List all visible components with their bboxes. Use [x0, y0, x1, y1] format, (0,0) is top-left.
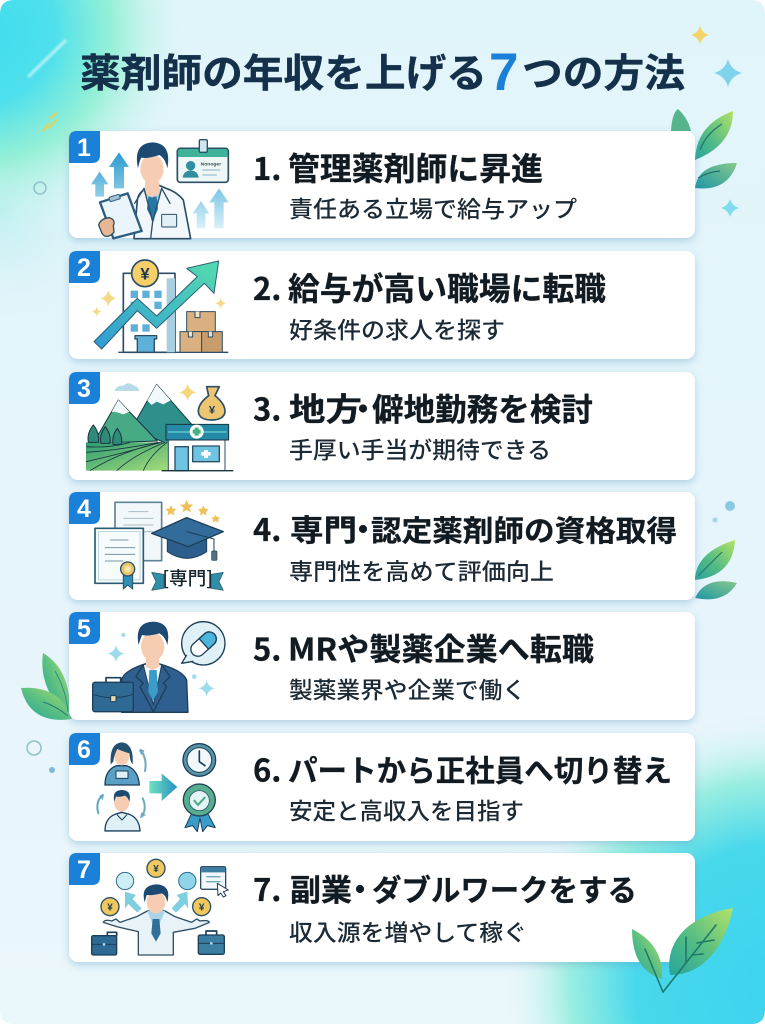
badge 5 — [69, 612, 100, 644]
panel: item 1 — [69, 131, 695, 239]
icon: side jobs and income sources — [92, 859, 228, 955]
heading 7: ・ — [344, 865, 376, 910]
icon: business person with briefcase and capsule — [93, 622, 225, 712]
heading 3: ・ — [348, 384, 378, 430]
badge 5: 5 — [77, 615, 91, 643]
badge 2: 2 — [77, 254, 91, 282]
decoration: left leaves — [21, 653, 72, 720]
badge 4 — [69, 492, 100, 524]
badge 2 — [69, 251, 100, 283]
icon: side jobs and income sources: ¥ — [199, 902, 205, 913]
panel: item 5 — [69, 612, 695, 720]
panel: item 2 — [69, 251, 695, 359]
heading 4: 専門 — [290, 506, 357, 550]
heading 7 — [253, 865, 637, 910]
heading 7: 副業 — [290, 866, 352, 910]
badge 3 — [69, 372, 100, 404]
panel: item 4 — [69, 492, 695, 600]
decoration: top-right leaves — [671, 109, 737, 188]
badge 7: 7 — [77, 856, 91, 884]
heading 2: 給与が高い職場に転職 — [288, 264, 606, 310]
icon: part-time to full-time conversion — [97, 742, 216, 832]
title: 薬剤師の年収を上げる — [80, 43, 487, 99]
heading 3 — [253, 384, 593, 430]
heading 4 — [253, 505, 677, 550]
badge 1 — [69, 131, 100, 163]
text 5: 製薬業界や企業で働く — [289, 671, 526, 705]
heading 5: 5. — [253, 624, 281, 670]
heading 7: ダブルワークをする — [372, 866, 637, 910]
heading 4: ・ — [348, 505, 378, 550]
icon: pharmacist with rising arrows: Nonoger — [201, 161, 221, 167]
text 1: 責任ある立場で給与アップ — [289, 190, 577, 224]
heading 3: 僻地勤務を検討 — [372, 384, 593, 430]
text 6: 安定と高収入を目指す — [289, 792, 524, 826]
icon: mountains, fields and pharmacy: ¥ — [209, 405, 216, 417]
heading 1: 管理薬剤師に昇進 — [288, 144, 543, 190]
badge 7 — [69, 853, 100, 885]
heading 1: 1. — [253, 144, 281, 189]
heading 3: 3. — [253, 384, 281, 430]
heading 6: 6. — [253, 746, 281, 790]
heading 5: MRや製薬企業へ転職 — [288, 624, 594, 670]
decoration: right-middle leaf — [695, 540, 737, 599]
decoration: sparkles and dots — [27, 26, 742, 773]
badge 1: 1 — [77, 134, 91, 162]
icon: mountains, fields and pharmacy — [86, 383, 233, 471]
badge 3: 3 — [77, 375, 91, 403]
icon: side jobs and income sources: ¥ — [153, 864, 159, 875]
text 7: 収入源を増やして稼ぐ — [289, 914, 527, 948]
heading 2: 2. — [253, 264, 281, 309]
badge 6 — [69, 733, 100, 765]
text 2: 好条件の求人を探す — [289, 311, 505, 345]
panel: item 3 — [69, 372, 695, 480]
icon: certificates and graduation cap — [95, 500, 223, 591]
heading 7: 7. — [253, 865, 281, 910]
decoration: bottom-right leaves — [632, 908, 733, 992]
panel: item 6 — [69, 733, 695, 841]
icon: pharmacist with rising arrows — [91, 140, 229, 239]
icon: side jobs and income sources: ¥ — [107, 902, 113, 913]
title: つの方法 — [522, 43, 685, 99]
icon: building and rising chart: ¥ — [140, 264, 150, 283]
title — [80, 43, 685, 102]
heading 4: 4. — [253, 505, 281, 550]
badge 4: 4 — [77, 495, 91, 523]
badge 6: 6 — [77, 736, 91, 764]
panel: item 7 — [69, 853, 695, 962]
title: 7 — [489, 43, 518, 102]
text 4: 専門性を高めて評価向上 — [289, 552, 554, 586]
heading 6: パートから正社員へ切り替え — [288, 746, 672, 790]
text 3: 手厚い手当が期待できる — [289, 431, 551, 465]
icon: building and rising chart — [92, 260, 228, 352]
heading 4: 認定薬剤師の資格取得 — [371, 508, 677, 550]
heading 3: 地方 — [289, 384, 362, 430]
icon: certificates and graduation cap: [専門] — [162, 564, 213, 591]
